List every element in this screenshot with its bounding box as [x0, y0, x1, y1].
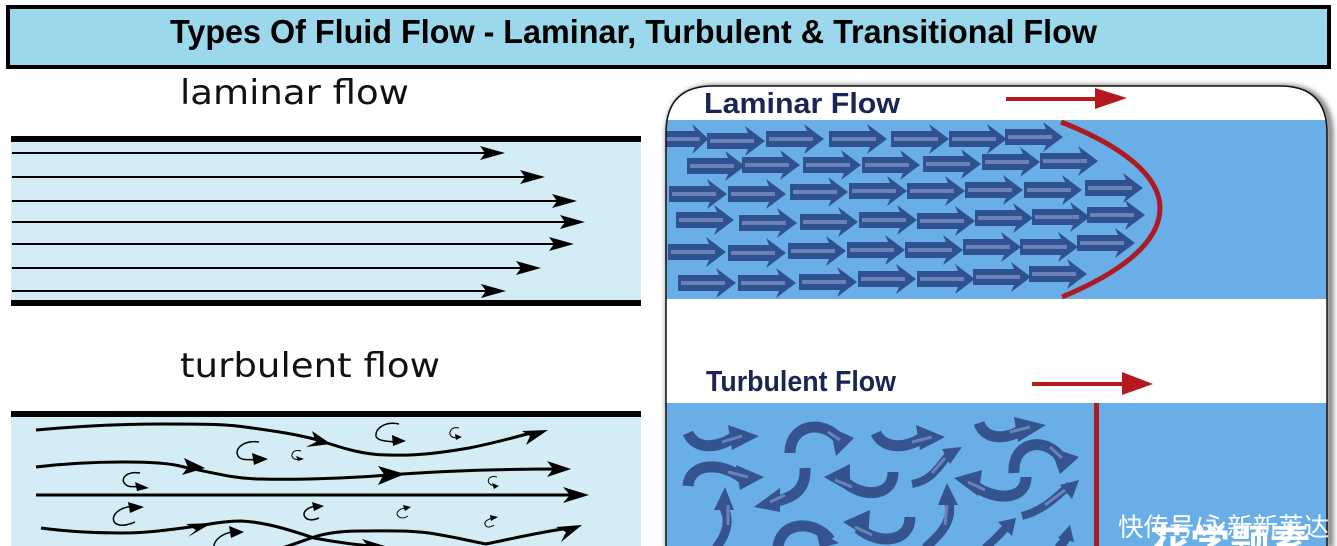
label: Laminar Flow: Laminar Flow [704, 88, 900, 120]
diagram: turbulent flow streamlines [11, 411, 641, 546]
eddy curls [113, 423, 497, 546]
laminar velocity curve [1061, 122, 1160, 297]
label: Turbulent Flow: Turbulent Flow [706, 366, 896, 398]
panel: velocity profiles [662, 86, 1330, 546]
arrow highlights [722, 427, 1065, 535]
arrow: turbulent direction [1032, 372, 1153, 395]
heading: laminar flow: laminar flow [180, 73, 409, 113]
laminar block arrows [662, 122, 1145, 298]
turbulent curved arrows [688, 423, 1070, 546]
heading: turbulent flow: turbulent flow [180, 346, 440, 386]
band: laminar water [666, 120, 1328, 299]
diagram: laminar flow streamlines [11, 136, 641, 306]
watermark: 快传号/永新新莱达 [1118, 514, 1329, 542]
band: turbulent water [666, 403, 1328, 546]
title text: Types Of Fluid Flow - Laminar, Turbulent & Transitional Flow [170, 13, 1097, 50]
arrow: laminar direction [1006, 88, 1127, 109]
title banner [8, 7, 1329, 67]
turbulent velocity line [1094, 403, 1099, 546]
